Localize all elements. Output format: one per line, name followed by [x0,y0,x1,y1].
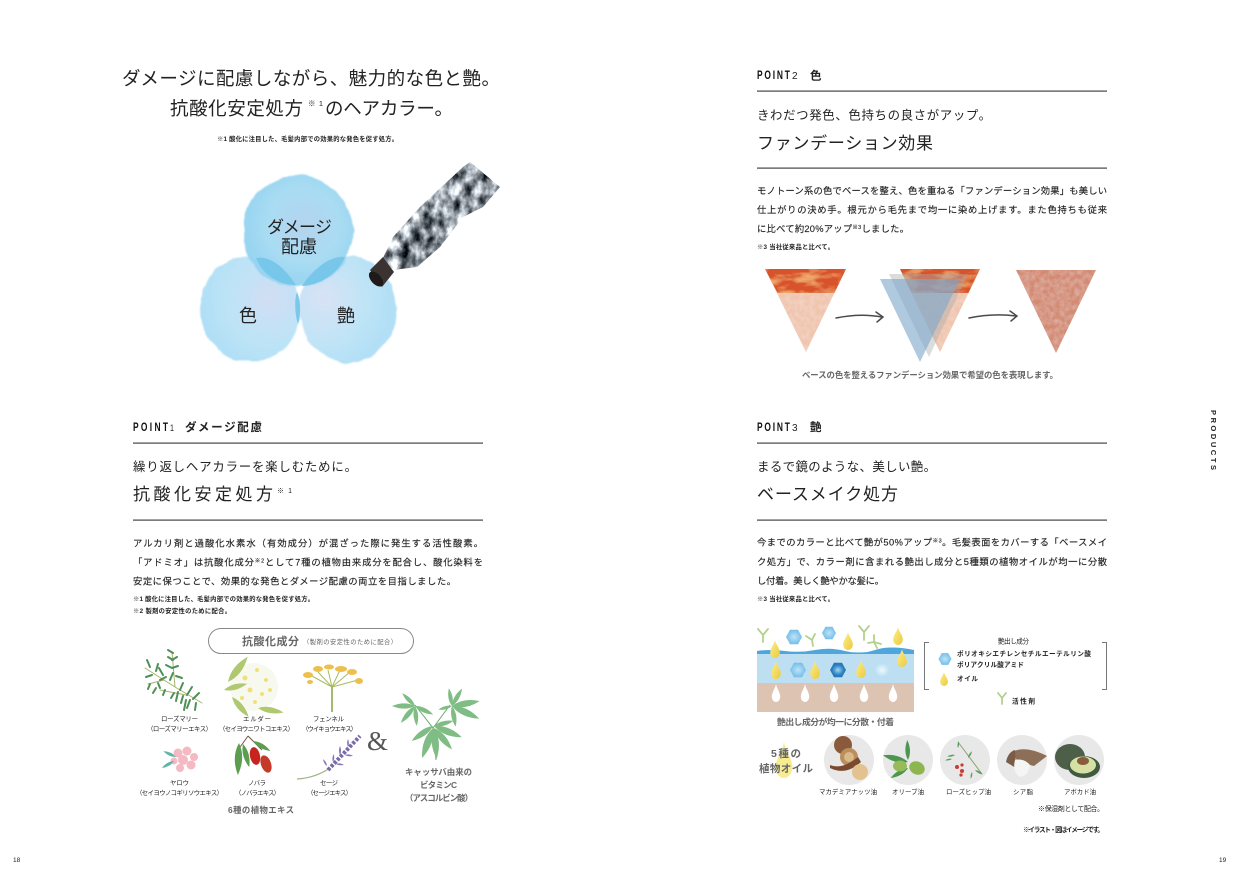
oil labels: マカデミアナッツ油 [819,787,877,796]
diagram: hair cross-section [757,626,914,712]
section title: ※1 [277,487,292,495]
label: color: 色 [239,306,257,326]
ampersand: & [367,726,388,756]
triangle: base colour [765,269,846,352]
pill: antioxidant ingredients [208,628,414,654]
label: yarrow [136,779,223,797]
panel: point 1 damage care [133,420,483,815]
oil labels: アボカド油 [1064,787,1096,796]
panel: point 2 color [757,68,1107,380]
side label: products: PRODUCTS [1209,410,1218,470]
body text: 安定に保つことで、効果的な発色とダメージ配慮の両立を目指しました。 [133,576,456,586]
circle: damage care [243,175,353,287]
title: 抗酸化安定処方 [170,98,303,119]
icon: shea [997,735,1047,785]
legend: 艶出し成分 [998,636,1029,646]
body text [757,536,1107,586]
label: gloss: 艶 [337,306,355,326]
label: elder: エルダー [243,714,271,723]
legend: オイル [957,675,978,683]
caption: vitamin C: キャッサバ由来の [405,767,472,777]
oil drops [770,627,907,679]
caption: diagram: 艶出し成分が均一に分散・付着 [777,716,894,727]
note: moisturizing: ※保湿剤として配合。 [1038,804,1104,813]
body text: ※3 [933,538,942,544]
arrow 1 [836,312,883,322]
label: damage care [267,218,332,257]
footnotes: ※1 酸化に注目した、毛髪内部での効果的な発色を促す処方。 [133,594,314,603]
body text: アルカリ剤と過酸化水素水（有効成分）が混ざった際に発生する活性酸素。 [133,538,483,548]
body text: として7種の植物由来成分を配合し、酸化染料を [265,556,483,568]
label: wild rose: ノバラ [248,779,266,787]
circle: gloss [299,256,397,362]
heading: point 2: 2 [792,71,798,82]
oil labels [819,787,1096,796]
title: ※1 [308,99,323,108]
layer: coating [757,652,914,683]
body text: 「アドミオ」は抗酸化成分 [133,558,254,568]
body text: ※3 [852,224,861,231]
body text: モノトーン系の色でベースを整え、色を重ねる「ファンデーション効果」も美しい [757,185,1107,196]
heading: point 1 [133,420,262,434]
triangle: result colour [1016,270,1096,353]
icon: macadamia [824,735,874,785]
page number 18: 18 [13,857,21,864]
heading: point 3: 艶 [810,420,822,434]
title footnote: ※1 酸化に注目した、毛髪内部での効果的な発色を促す処方。 [217,134,398,143]
heading: point 1: 1 [170,423,174,433]
caption: six plant extracts: 6種の植物エキス [228,805,294,815]
label: rosemary: （ローズマリーエキス） [147,724,212,733]
subheading: きわだつ発色、色持ちの良さがアップ。 [757,108,991,122]
legend: 活性剤 [1012,696,1035,706]
label: sage [307,779,352,797]
section title: ファンデーション効果 [757,133,933,153]
body text: しました。 [861,224,909,234]
body text: に比べて約20%アップ [757,224,852,234]
title: ダメージに配慮しながら、魅力的な色と艶。 [122,68,500,89]
section title: ベースメイク処方 [757,485,898,504]
body text: 今までのカラーと比べて艶が50%アップ [757,538,932,548]
heading: point 2: 色 [810,68,822,82]
blue particles [790,663,806,677]
heading: point 2 [757,68,822,82]
footnotes: ※2 製剤の安定性のために配合。 [133,606,231,615]
label: rosemary [147,714,212,733]
pill: antioxidant ingredients: （製剤の安定性のために配合） [303,637,397,646]
title [122,68,500,119]
body text [133,538,483,586]
label: sage: （セージエキス） [307,789,352,797]
legend [924,636,1106,706]
caption: vitamin C [405,767,473,803]
label: elder: （セイヨウニワトコエキス） [219,725,294,733]
heading: point 1: POINT [133,422,169,434]
body text: ク処方」で、カラー剤に含まれる艶出し成分と5種類の植物オイルが均一に分散 [757,556,1107,567]
note: illustration: ※イラスト・図はイメージです。 [1023,826,1104,834]
label: fennel [302,715,357,733]
icon: metal tube [366,162,500,289]
icon: avocado [1054,735,1104,785]
caption: ベースの色を整えるファンデーション効果で希望の色を表現します。 [802,370,1058,380]
title: のヘアカラー。 [325,98,453,119]
icon: olive [882,735,933,785]
illustration: cassava leaves [392,688,481,760]
label: elder [219,714,294,733]
label: damage care: ダメージ [267,218,332,237]
footnote: ※3 当社従来品と比べて。 [757,242,834,251]
body text: し付着。美しく艶やかな髪に。 [757,575,884,586]
heading: point 2: POINT [757,70,790,82]
diagram: three watercolour circles and tube [200,162,500,362]
heading: point 1: ダメージ配慮 [185,420,262,434]
arrow 2 [969,311,1017,321]
panel: point 3 gloss [757,420,1107,834]
body text: ※2 [255,558,264,564]
caption: vitamin C: （アスコルビン酸） [405,793,473,803]
label: wild rose: （ノバラエキス） [235,789,280,797]
legend: ポリアクリル酸アミド [957,660,1024,669]
overlap shapes [256,257,345,324]
heading: five plant oils: 5種の [771,747,801,760]
caption: vitamin C: ビタミンC [420,780,457,790]
heading: five plant oils [759,742,814,778]
icon: rosehip [940,735,990,785]
illustration: rosemary [145,650,202,710]
subheading: 繰り返しヘアカラーを楽しむために。 [133,459,357,474]
white droplets [772,684,897,702]
page number 19: 19 [1219,857,1227,864]
body text [757,185,1107,234]
label: rosemary: ローズマリー [161,714,198,723]
subheading: まるで鏡のような、美しい艶。 [757,459,936,474]
heading: point 3: POINT [757,422,790,434]
label: fennel: フェンネル [313,715,345,723]
illustration: yarrow [161,746,198,772]
label: wild rose [235,779,280,797]
activator marks [758,626,881,648]
body text: 。毛髪表面をカバーする「ベースメイ [942,536,1107,548]
layer: hair [757,683,914,712]
heading: point 3 [757,420,822,434]
label: sage: セージ [320,779,339,787]
body text: 仕上がりの決め手。根元から毛先まで均一に染め上げます。また色持ちも従来 [757,204,1107,215]
oil labels: オリーブ油 [892,787,924,796]
label: damage care: 配慮 [281,237,317,257]
illustration: wild rose [234,736,274,775]
label: yarrow: （セイヨウノコギリソウエキス） [136,789,223,797]
label: yarrow: ヤロウ [170,779,189,787]
oil labels: ローズヒップ油 [946,787,991,796]
oil labels: シア脂 [1013,787,1034,796]
footnotes [133,594,314,615]
heading: five plant oils: 植物オイル [759,762,814,775]
legend: ポリオキシエチレンセチルエーテルリン酸 [957,649,1091,658]
triangle: layered colours [880,269,980,362]
section title: 抗酸化安定処方 [133,485,273,504]
illustration: sage [297,736,360,779]
label: fennel: （ウイキョウエキス） [302,725,357,733]
pill: antioxidant ingredients: 抗酸化成分 [242,634,299,648]
illustration: elder [223,655,284,719]
heading: point 3: 3 [792,423,798,434]
footnote: ※3 当社従来品と比べて。 [757,594,834,603]
illustration: fennel [303,664,363,712]
circle: color [200,256,300,362]
